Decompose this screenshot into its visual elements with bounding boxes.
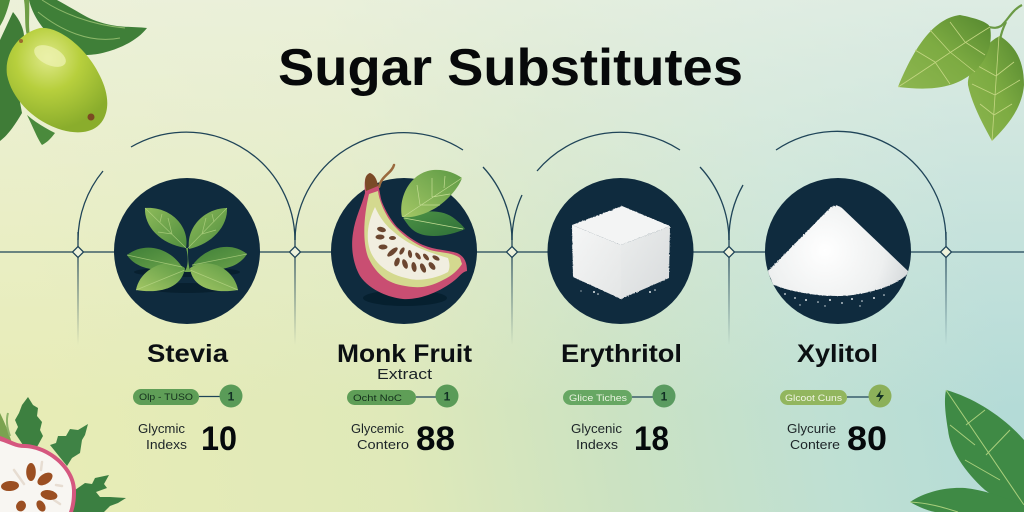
icon: monk fruit xyxy=(331,165,477,324)
stat: monk fruit glycemic content xyxy=(351,420,455,458)
stat: erythritol glycemic index: Glycenic xyxy=(571,422,622,436)
stat: stevia glycemic index xyxy=(138,420,237,458)
badge: erythritol xyxy=(563,384,676,408)
stat: xylitol glycemic content xyxy=(787,420,887,458)
stat: stevia glycemic index: 10 xyxy=(201,420,237,458)
label: monk fruit extract: Extract xyxy=(377,366,433,383)
badge: stevia: Olp - TUSO xyxy=(139,392,193,403)
label: stevia: Stevia xyxy=(147,340,229,368)
timeline with arcs and nodes xyxy=(0,131,1024,345)
stat: monk fruit glycemic content: Glycemic xyxy=(351,422,404,436)
badge: monk fruit xyxy=(347,384,458,408)
stat: stevia glycemic index: Indexs xyxy=(146,438,187,452)
decoration: bottom-right leaves xyxy=(910,390,1024,512)
badge: xylitol xyxy=(780,384,892,408)
stat: monk fruit glycemic content: 88 xyxy=(416,420,455,458)
decoration: bottom-left fruit and leaves xyxy=(0,397,126,512)
badge: erythritol: Glice Tiches xyxy=(569,393,627,404)
stat: erythritol glycemic index xyxy=(571,420,669,458)
badge: monk fruit: 1 xyxy=(444,390,451,404)
stat: erythritol glycemic index: Indexs xyxy=(576,438,618,452)
icon: xylitol powder pile xyxy=(765,178,911,324)
icon: erythritol cube xyxy=(548,178,694,324)
stat: monk fruit glycemic content: Contero xyxy=(357,438,409,452)
badge: erythritol: 1 xyxy=(661,390,668,404)
badge: xylitol: Glcoot Cuns xyxy=(785,393,842,404)
label: xylitol: Xylitol xyxy=(797,340,878,368)
badge: stevia xyxy=(133,384,242,408)
label: monk fruit extract: Monk Fruit xyxy=(337,340,473,368)
badge: stevia: 1 xyxy=(228,390,235,404)
stat: xylitol glycemic content: Glycurie xyxy=(787,422,836,436)
label: erythritol: Erythritol xyxy=(561,340,682,368)
badge: monk fruit: Ocht NoC xyxy=(353,393,402,404)
decoration: top-right leaves xyxy=(898,5,1024,141)
decoration: top-left fruit and leaves xyxy=(0,0,147,145)
icon: stevia leaves xyxy=(114,178,260,324)
label: monk fruit extract xyxy=(337,340,473,383)
stat: erythritol glycemic index: 18 xyxy=(634,420,669,458)
stat: xylitol glycemic content: 80 xyxy=(847,420,887,458)
stat: stevia glycemic index: Glycmic xyxy=(138,422,185,436)
title: Sugar Substitutes xyxy=(278,39,743,97)
stat: xylitol glycemic content: Contere xyxy=(790,438,840,452)
